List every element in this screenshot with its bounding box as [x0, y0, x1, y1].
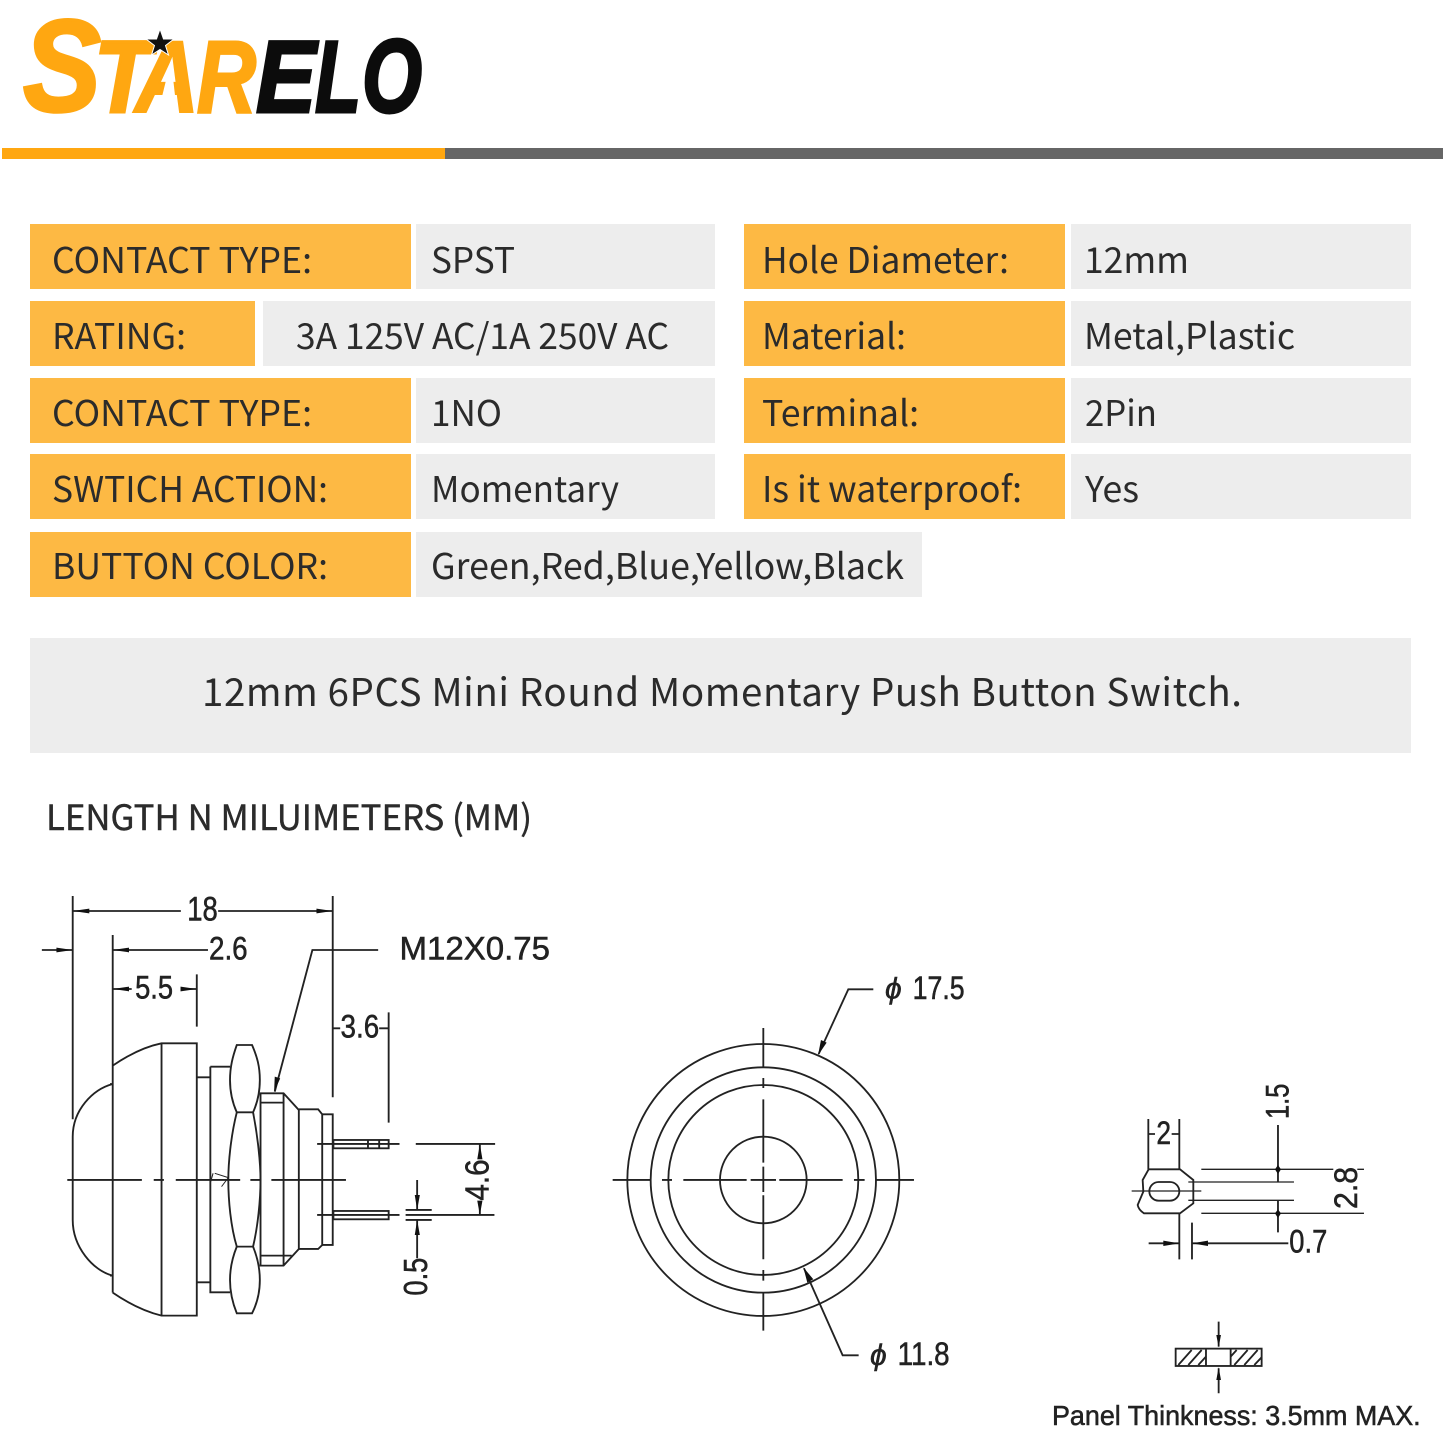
row: material: Metal,Plastic [1084, 309, 1295, 360]
panel thickness note: Panel Thinkness: 3.5mm MAX. [1052, 1400, 1421, 1431]
dimension 0.5 [397, 1180, 434, 1296]
banner: product title [30, 638, 1411, 753]
row: terminal: 2Pin [1085, 386, 1157, 437]
row: contact type SPST: CONTACT TYPE: [52, 233, 312, 284]
callout diameter 17.5 [818, 970, 965, 1055]
specification table [30, 224, 1411, 597]
logo: Starelo: E [256, 20, 319, 134]
logo: Starelo: L [315, 20, 361, 134]
row: material [744, 301, 1411, 366]
row: button color: Green,Red,Blue,Yellow,Black [431, 539, 904, 590]
front view drawing [613, 970, 965, 1372]
row: waterproof: Yes [1084, 462, 1139, 513]
row: rating: RATING: [52, 309, 186, 360]
row: rating [30, 301, 715, 366]
row: contact type 1NO: CONTACT TYPE: [52, 386, 312, 437]
row: material: Material: [762, 309, 906, 360]
dimension 0.7: 0.7 [1289, 1223, 1327, 1260]
row: hole diameter: 12mm [1084, 233, 1189, 284]
dimension 2: 2 [1156, 1114, 1171, 1151]
dimension 4.6: 4.6 [458, 1159, 495, 1201]
dimension 18 [73, 890, 333, 1119]
row: hole diameter: Hole Diameter: [762, 233, 1009, 284]
dimension 1.5 [1260, 1084, 1296, 1232]
dimension 3.6 [333, 1008, 389, 1123]
dimension 5.5: 5.5 [135, 969, 173, 1005]
dimension 1.5: 1.5 [1260, 1084, 1296, 1119]
dimension 5.5 [113, 969, 197, 1027]
logo: Starelo: O [362, 19, 422, 135]
dimension 2 [1148, 1114, 1179, 1169]
dimension 18: 18 [187, 890, 218, 929]
row: contact type 1NO [30, 378, 715, 443]
button body outline [73, 1043, 333, 1316]
dimension 0.5: 0.5 [397, 1258, 434, 1296]
dimension 2.6 [42, 930, 248, 1050]
callout diameter 17.5: ϕ [885, 973, 902, 1006]
logo: Starelo [23, 0, 422, 139]
concentric circles [627, 1044, 899, 1316]
side view drawing [42, 890, 550, 1316]
row: terminal: Terminal: [762, 386, 919, 437]
row: contact type SPST [30, 224, 715, 289]
dimension 3.6: 3.6 [341, 1008, 379, 1045]
dimension 0.7 [1149, 1213, 1327, 1260]
row: switch action: SWTICH ACTION: [52, 462, 328, 513]
row: waterproof [744, 454, 1411, 519]
row: switch action [30, 454, 715, 519]
row: terminal [744, 378, 1411, 443]
callout diameter 11.8: 11.8 [898, 1336, 950, 1372]
callout M12X0.75: M12X0.75 [400, 930, 550, 966]
centre lines [613, 1028, 914, 1331]
terminal pins [67, 1140, 495, 1219]
terminal outline [1132, 1169, 1364, 1213]
logo: Starelo: T [94, 20, 158, 134]
row: rating: 3A 125V AC/1A 250V AC [296, 309, 669, 360]
row: contact type 1NO: 1NO [431, 386, 502, 437]
callout diameter 11.8: ϕ [870, 1339, 887, 1372]
dimension 4.6 [458, 1144, 495, 1215]
callout M12X0.75 [274, 930, 550, 1092]
callout diameter 11.8 [803, 1267, 950, 1372]
row: button color [30, 532, 922, 597]
header rule [2, 148, 1443, 159]
logo: Starelo: R [197, 20, 256, 134]
row: waterproof: Is it waterproof: [762, 462, 1022, 513]
panel thickness section [1176, 1322, 1262, 1393]
row: contact type SPST: SPST [431, 233, 515, 284]
row: button color: BUTTON COLOR: [52, 539, 328, 590]
row: hole diameter [744, 224, 1411, 289]
heading: length in millimeters: LENGTH N MILUIMETERS (MM) [46, 790, 532, 841]
dimension 2.6: 2.6 [209, 930, 248, 966]
dimension 2.8: 2.8 [1328, 1167, 1364, 1209]
logo: Starelo: A [132, 20, 199, 134]
callout diameter 17.5: 17.5 [913, 970, 965, 1006]
terminal detail drawing [1052, 1084, 1421, 1431]
banner: product title: 12mm 6PCS Mini Round Momentary Push Button Switch. [202, 662, 1242, 718]
row: switch action: Momentary [431, 462, 619, 513]
